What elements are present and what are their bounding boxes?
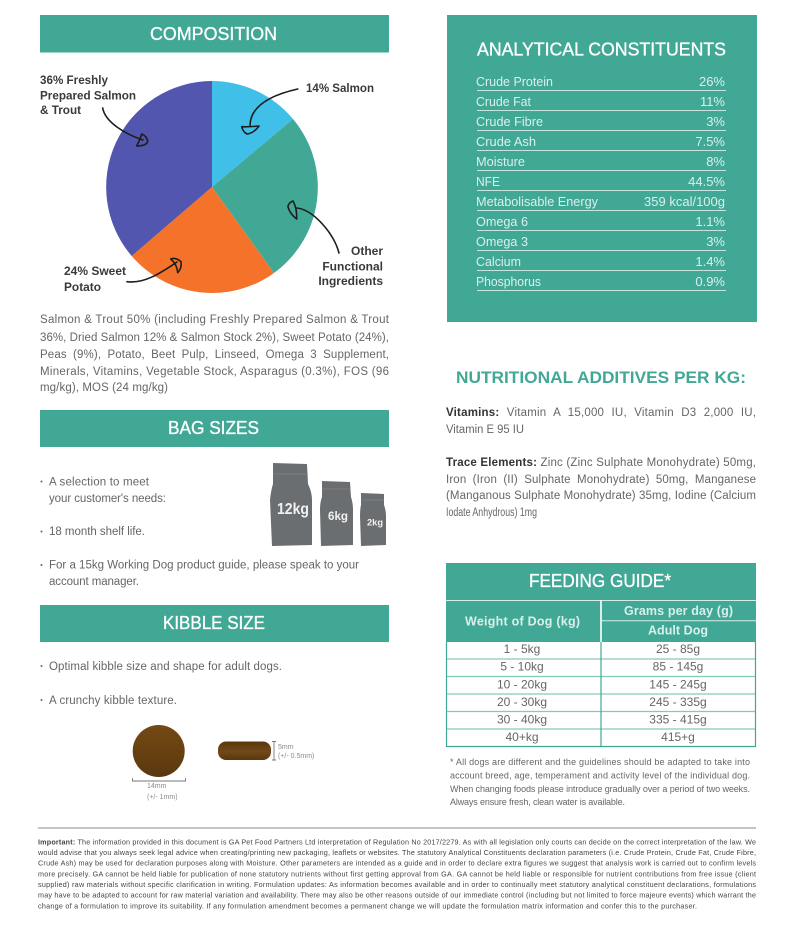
table: constituents values: 8% [706,154,725,169]
label: 36% freshly prepared salmon and trout [40,73,136,117]
dimension: kibble width: (+/- 1mm) [147,794,178,801]
footer: important legal notice: change of a formulation to improve its suitability. If any formulation amendment becomes a permanent change we will update the formulation matrix information and confer this to the purchaser. [38,902,697,910]
dimension: kibble width: 14mm [147,783,167,790]
label: other functional ingredients [318,244,383,288]
table: constituents values: 11% [700,94,725,109]
panel: kibble size [40,605,389,801]
table: constituents values: Metabolisable Energy [476,194,598,209]
table: constituents values [476,74,726,290]
heading: composition [40,15,389,52]
text: composition description: Minerals, Vitamins, Vegetable Stock, Asparagus (0.3%), FOS (96 [40,366,389,378]
footer: important legal notice: Crude Ash) may be used for declaration purposes along with Moisture. Other parameters are intended as a guide and in order to declare extra figures we suggest that analysis work is carried out to confirm levels [38,859,756,868]
dimension: kibble height: (+/- 0.5mm) [278,753,314,760]
table: constituents values: Omega 6 [476,214,528,229]
text: bag size bullets: your customer's needs: [49,493,166,505]
text: feeding note: * All dogs are different and the guidelines should be adapted to take into [450,757,750,767]
footer: important legal notice: supplied) raw materials without specific clarification in writing. Formulation updates: As information becomes available and in order to continually meet statutory analytical constituent declarations, formulations [38,880,756,889]
heading: nutritional additives per kg: NUTRITIONAL ADDITIVES PER KG: [456,368,746,387]
footer: important legal notice: more precisely. GA cannot be held liable for publication of none statutory nutrients without first getting approval from GA. GA cannot be held liable or responsible for nutrient contributions from free issue (client [38,870,756,878]
icon: 6kg bag [320,481,353,546]
table: constituents values: 1.4% [695,254,725,269]
table: constituents values: Omega 3 [476,234,528,249]
arrow: to sweet potato slice [127,258,181,282]
icon: 12kg bag: 12kg [277,501,309,518]
arrow: to freshly prepared salmon slice [103,108,148,146]
label: 14% salmon: 14% Salmon [306,81,374,95]
arrow: to salmon slice [242,89,298,134]
text: trace elements: Iodate Anhydrous) 1mg [446,507,537,519]
table: feeding guide: 40+kg [505,730,539,744]
text: trace elements: Trace Elements: Zinc (Zinc Sulphate Monohydrate) 50mg, [446,457,756,469]
label: other functional ingredients: Other [351,244,383,258]
label: 36% freshly prepared salmon and trout: Prepared Salmon [40,88,136,102]
text: kibble bullets [40,661,282,707]
text: composition description: Salmon & Trout 50% (including Freshly Prepared Salmon & Trout [40,314,390,326]
table: feeding guide: 20 - 30kg [497,695,547,709]
text: vitamins: Vitamin E 95 IU [446,424,524,436]
table: constituents values: 44.5% [688,174,725,189]
heading: analytical constituents: ANALYTICAL CONSTITUENTS [477,40,726,60]
text: vitamins [446,407,756,436]
panel background [447,15,757,322]
table: feeding guide [446,600,756,746]
dimension: kibble height [272,742,314,760]
icon: 12kg bag [270,463,312,546]
table: constituents values: Crude Fibre [476,114,543,129]
table: feeding guide: 30 - 40kg [497,713,547,727]
text: trace elements: Iron (Iron (II) Sulphate Monohydrate) 50mg, Manganese [446,474,756,486]
panel: bag sizes [40,410,389,588]
heading: bag sizes [40,410,389,447]
text: bag size bullets: For a 15kg Working Dog product guide, please speak to your [49,560,359,572]
table: feeding guide: Adult Dog [648,624,708,638]
icon: 6kg bag: 6kg [328,511,348,523]
heading: kibble size: KIBBLE SIZE [163,613,265,633]
text: feeding note: account breed, age, temperament and activity level of the individual dog. [450,770,750,780]
table: constituents values: NFE [476,174,500,189]
panel: feeding guide [446,563,756,807]
table: constituents values: 26% [699,74,725,89]
panel: composition [40,15,390,394]
label: 36% freshly prepared salmon and trout: 36% Freshly [40,73,108,87]
table: constituents values: 3% [706,234,725,249]
table: constituents values: 0.9% [695,274,725,289]
table: feeding guide: 245 - 335g [649,695,707,709]
heading: feeding guide [446,563,756,600]
text: bag size bullets: 18 month shelf life. [49,526,145,538]
label: other functional ingredients: Functional [322,260,383,274]
table: feeding guide: 335 - 415g [649,713,707,727]
table: feeding guide: 1 - 5kg [504,642,540,656]
footer: important legal notice: would advise that you always seek legal advice when creating/printing new packaging, leaflets or websites. The statutory Analytical Constituents declaration parameters (i.e. Crude Protein, Crude Fat, Crude Fibre, [37,848,756,857]
table: constituents values: Calcium [476,254,521,269]
heading: kibble size [40,605,389,642]
text: composition description: 36%, Dried Salmon 12% & Salmon Stock 2%), Sweet Potato (24%), [40,332,389,344]
panel: analytical constituents [447,15,757,322]
table: feeding guide: Grams per day (g) [624,604,733,618]
text: vitamins: Vitamins: Vitamin A 15,000 IU, Vitamin D3 2,000 IU, [446,407,756,419]
table: constituents values: Phosphorus [476,274,541,289]
dimension: kibble width [132,778,186,801]
heading: feeding guide: FEEDING GUIDE* [529,571,671,591]
footer: important legal notice: Important: The information provided in this document is GA Pet Food Partners Ltd interpretation of Regulation No 2017/2279. As with all legislation only courts can decide on the correct interpretation of the law. We [38,838,756,846]
table: constituents values: Crude Protein [476,74,553,89]
text: composition description: mg/kg), MOS (24 mg/kg) [40,382,168,394]
table: constituents values: 3% [706,114,725,129]
text: bag size bullets [40,476,359,588]
table: constituents values: 1.1% [695,214,725,229]
table: constituents values: 7.5% [695,134,725,149]
icon: kibble side view [218,742,271,760]
arrow: to other functional ingredients slice [288,201,339,253]
text: bag size bullets: A selection to meet [49,476,150,488]
panel: nutritional additives [446,368,756,519]
text: kibble bullets: A crunchy kibble texture. [49,695,177,707]
text: trace elements [446,457,756,519]
label: 24% sweet potato: 24% Sweet [64,264,126,278]
heading: composition: COMPOSITION [150,24,277,44]
table: feeding guide: Weight of Dog (kg) [465,615,580,629]
text: trace elements: (Manganous Sulphate Monohydrate) 35mg, Iodine (Calcium [446,490,756,502]
text: feeding note: Always ensure fresh, clean water is available. [450,797,625,807]
text: bag size bullets: account manager. [49,576,139,588]
label: 36% freshly prepared salmon and trout: & Trout [40,103,81,117]
table: constituents values: Crude Ash [476,134,536,149]
footer: important legal notice: may have to be adapted to account for raw material variation and availability. There may also be other reasons outside of our immediate control (including but not limited to force majeure events) which warrant the [38,891,756,900]
icon: 2kg bag: 2kg [367,518,383,529]
icon: 2kg bag [360,493,386,546]
table: feeding guide: 25 - 85g [656,642,700,656]
text: composition description [40,314,390,394]
table: feeding guide: 145 - 245g [649,678,707,692]
heading: bag sizes: BAG SIZES [168,418,259,438]
table: feeding guide: 5 - 10kg [500,660,544,674]
dimension: kibble height: 5mm [278,744,294,751]
table: feeding guide: 85 - 145g [653,660,703,674]
label: other functional ingredients: Ingredients [318,274,383,288]
label: 24% sweet potato: Potato [64,280,101,294]
pie chart [106,81,318,293]
text: feeding note: When changing foods please introduce gradually over a period of two weeks. [450,784,750,794]
table: constituents values: 359 kcal/100g [644,194,725,209]
label: 24% sweet potato [64,264,126,294]
footer: important legal notice [37,828,756,910]
text: feeding note [450,757,750,807]
table: feeding guide: 415+g [661,730,695,744]
icon: round kibble top view [133,725,185,777]
text: kibble bullets: Optimal kibble size and shape for adult dogs. [49,661,282,673]
table: feeding guide: 10 - 20kg [497,678,547,692]
text: composition description: Peas (9%), Potato, Beet Pulp, Linseed, Omega 3 Supplement, [40,349,389,361]
table: constituents values: Crude Fat [476,94,531,109]
table: constituents values: Moisture [476,154,525,169]
